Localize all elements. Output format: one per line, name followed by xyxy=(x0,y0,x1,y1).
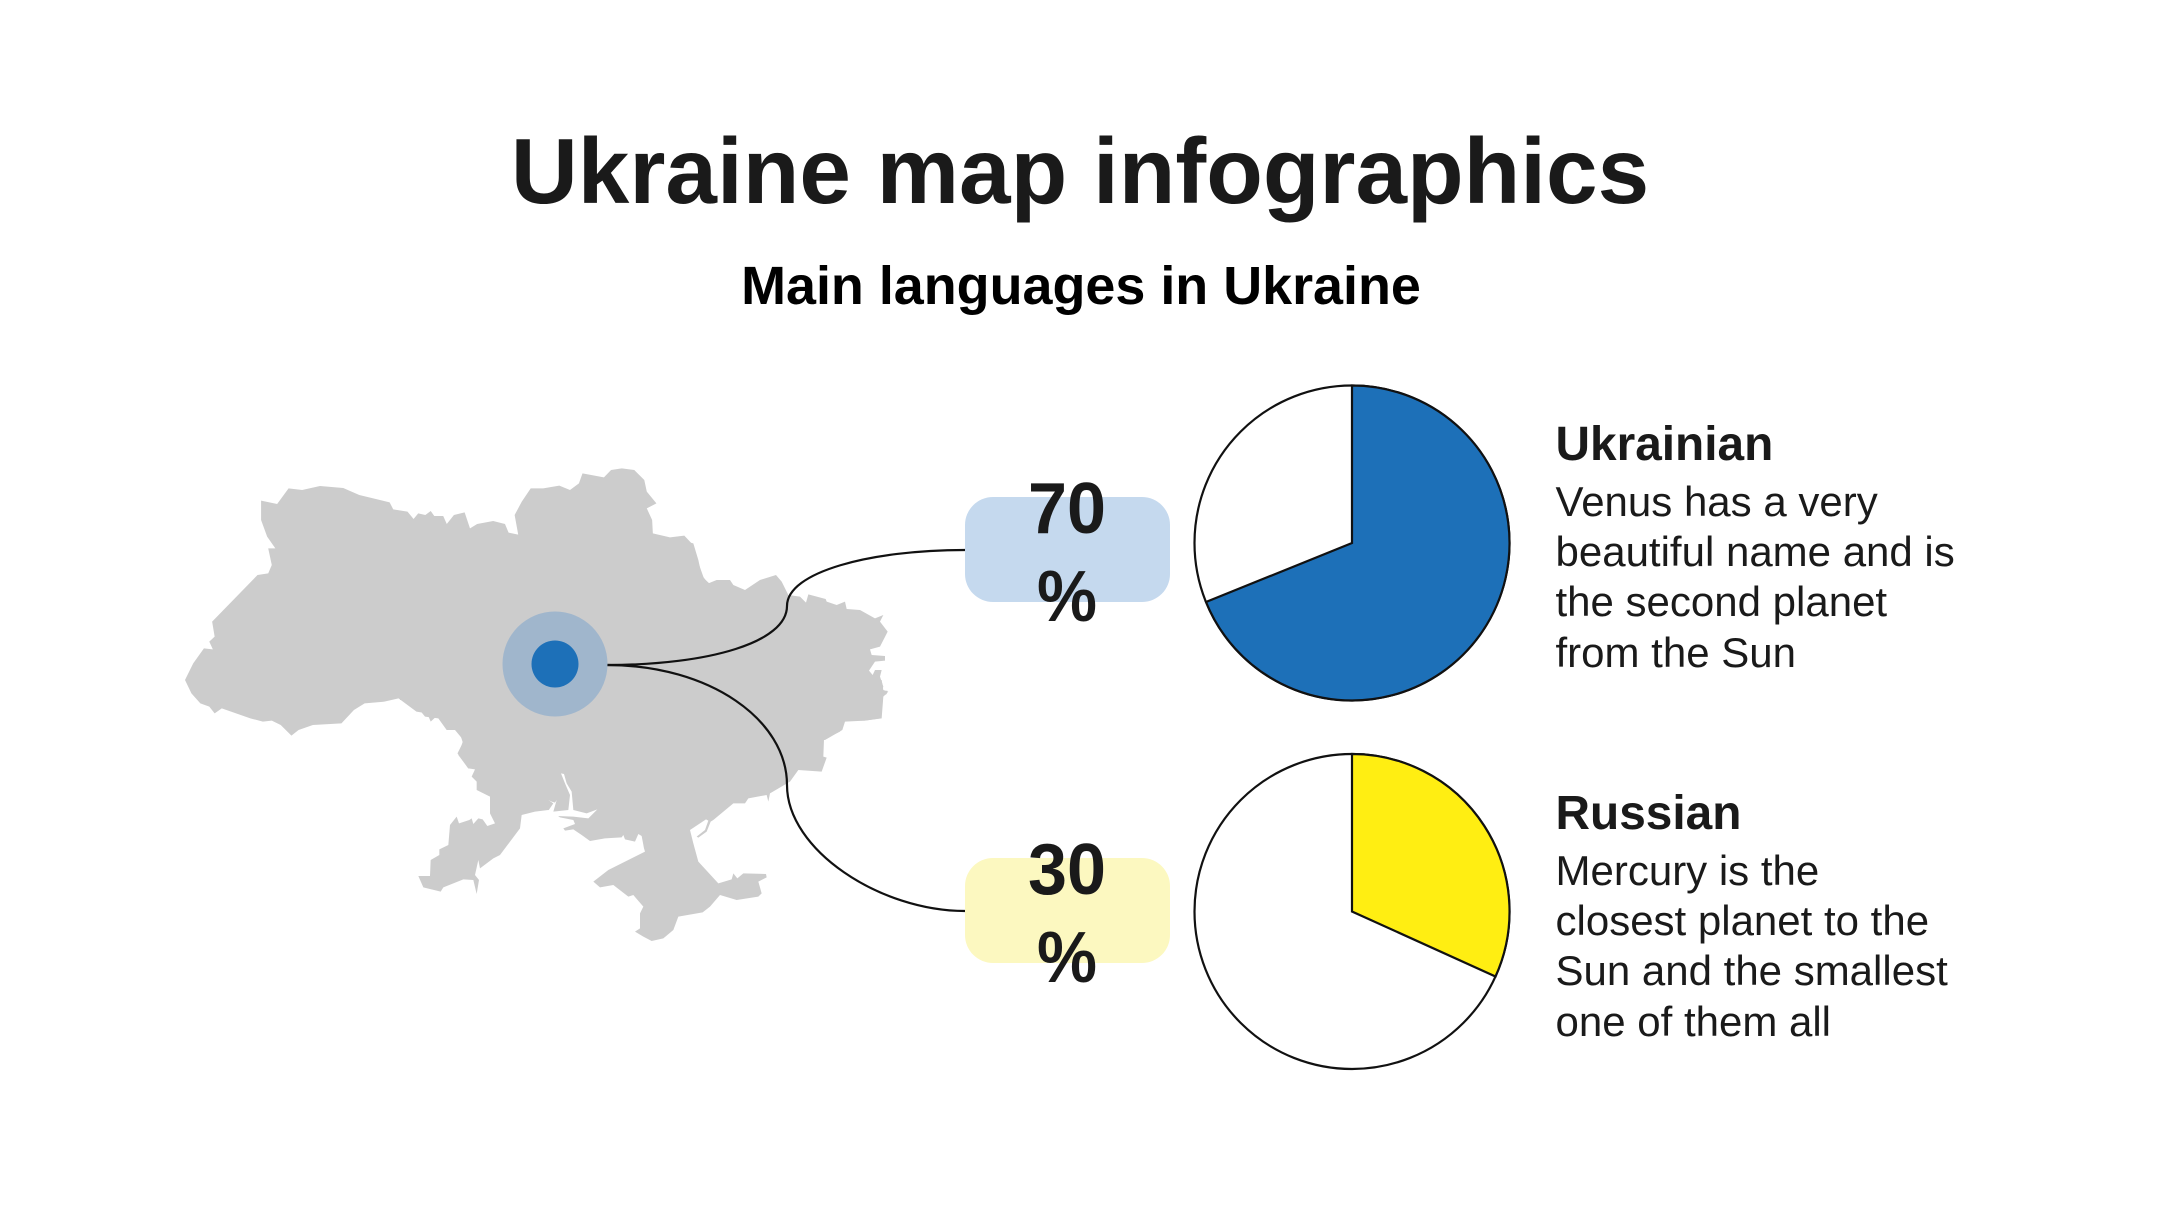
text block: Russian: one of them all xyxy=(1556,998,1831,1045)
callout: 30 percent: 30 xyxy=(1028,830,1106,910)
map of Ukraine xyxy=(185,468,888,941)
text block: Russian xyxy=(1556,787,1948,1045)
callout: 70 percent xyxy=(965,469,1170,637)
text block: Ukrainian: Venus has a very xyxy=(1556,478,1878,525)
text block: Russian: Sun and the smallest xyxy=(1556,947,1948,994)
connector to Russian xyxy=(607,665,965,911)
callout: 70 percent: % xyxy=(1037,557,1097,637)
subtitle: Main languages in Ukraine xyxy=(741,256,1421,316)
text block: Ukrainian: beautiful name and is xyxy=(1556,528,1955,575)
text block: Russian: Mercury is the xyxy=(1556,847,1819,894)
text block: Ukrainian: Ukrainian xyxy=(1556,418,1773,471)
pie chart: Russian xyxy=(1194,754,1510,1069)
callout: 30 percent xyxy=(965,830,1170,998)
callout: 30 percent: % xyxy=(1037,918,1097,998)
pie chart: Ukrainian xyxy=(1194,386,1510,701)
title: Ukraine map infographics xyxy=(511,119,1649,223)
text block: Ukrainian xyxy=(1556,418,1955,676)
text block: Russian: closest planet to the xyxy=(1556,897,1929,944)
text block: Ukrainian: the second planet xyxy=(1556,578,1887,625)
text block: Russian: Russian xyxy=(1556,787,1741,840)
location marker xyxy=(502,612,608,716)
callout: 70 percent: 70 xyxy=(1028,469,1106,549)
connector to Ukrainian xyxy=(607,550,965,665)
text block: Ukrainian: from the Sun xyxy=(1556,629,1796,676)
